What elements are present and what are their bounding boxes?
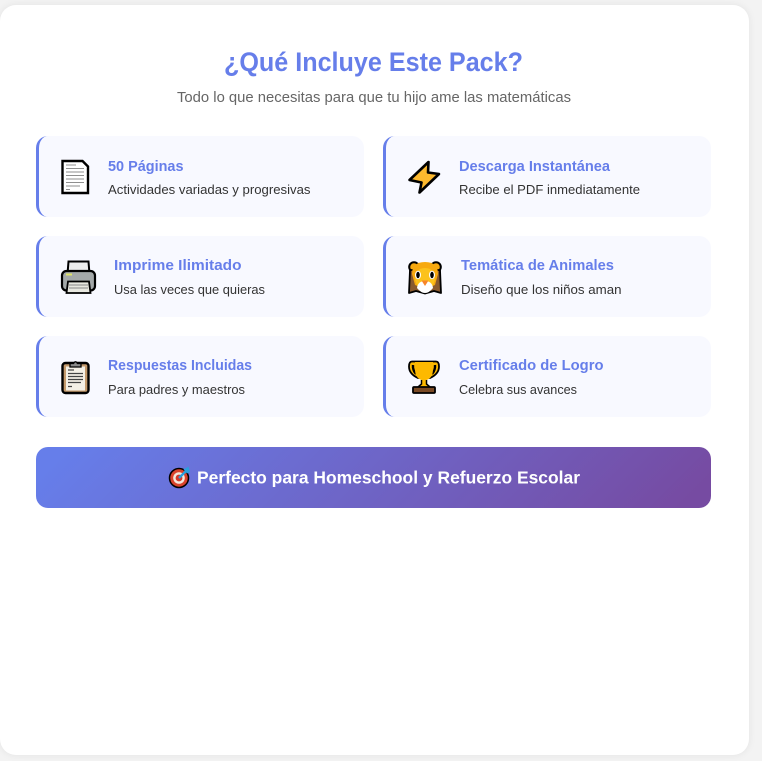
icon: document bbox=[62, 161, 88, 193]
panel: Temática de Animales bbox=[383, 236, 711, 317]
text: description: Celebra sus avances bbox=[459, 382, 577, 397]
panel: Imprime Ilimitado bbox=[36, 236, 364, 317]
text: description: Recibe el PDF inmediatamente bbox=[459, 182, 640, 197]
title: ¿Qué Incluye Este Pack? bbox=[224, 47, 523, 77]
heading: Imprime Ilimitado: Imprime Ilimitado bbox=[114, 258, 242, 274]
text: description: Diseño que los niños aman bbox=[461, 282, 622, 297]
icon: trophy bbox=[409, 362, 439, 393]
panel: Respuestas Incluidas bbox=[36, 336, 364, 417]
heading: Temática de Animales: Temática de Animales bbox=[461, 258, 614, 274]
icon: clipboard bbox=[62, 362, 88, 393]
icon: target bbox=[170, 466, 190, 488]
banner: Homeschool bbox=[36, 447, 711, 508]
text: description: Usa las veces que quieras bbox=[114, 282, 265, 297]
subtitle: Todo lo que necesitas para que tu hijo ame las matemáticas bbox=[177, 90, 571, 106]
heading: Respuestas Incluidas: Respuestas Incluidas bbox=[108, 358, 252, 374]
text: description: Actividades variadas y progresivas bbox=[108, 182, 311, 197]
icon: printer bbox=[62, 262, 95, 293]
heading: Descarga Instantánea: Descarga Instantánea bbox=[459, 159, 611, 175]
heading: 50 Páginas: 50 Páginas bbox=[108, 159, 184, 175]
panel: Descarga Instantánea bbox=[383, 136, 711, 217]
icon: lightning bolt bbox=[410, 162, 439, 192]
panel: Certificado de Logro bbox=[383, 336, 711, 417]
icon: lion bbox=[409, 262, 441, 294]
banner text: Perfecto para Homeschool y Refuerzo Escolar bbox=[197, 468, 580, 488]
text: description: Para padres y maestros bbox=[108, 382, 245, 397]
panel: 50 Páginas bbox=[36, 136, 364, 217]
heading: Certificado de Logro: Certificado de Logro bbox=[459, 358, 604, 374]
